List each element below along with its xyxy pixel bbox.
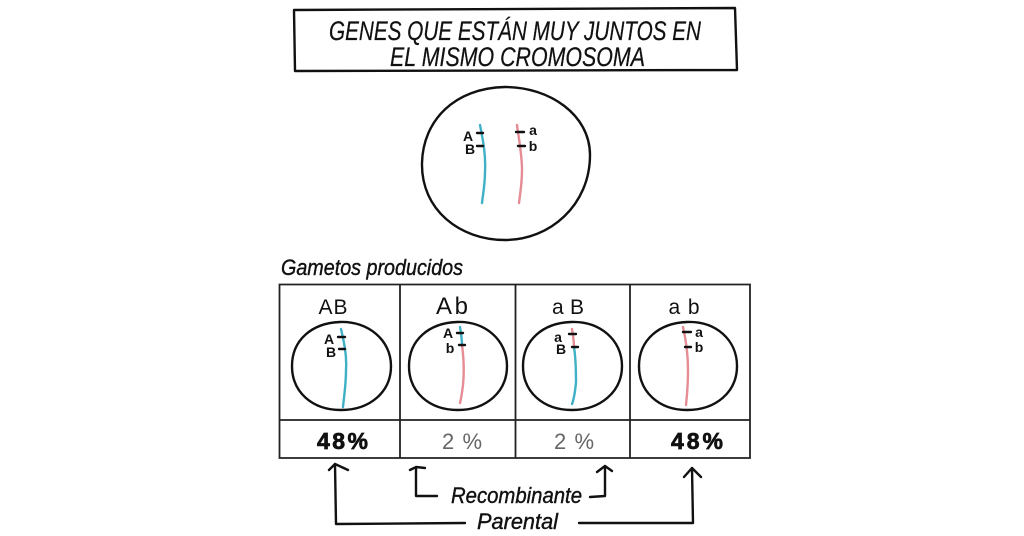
gamete Ab: A — [443, 325, 453, 341]
gamete AB — [292, 296, 391, 410]
label: parental: Parental — [477, 509, 559, 534]
gamete aB: a — [554, 329, 562, 345]
diagram: parent cell with two chromosomes — [422, 87, 590, 240]
table of gametes — [280, 284, 750, 458]
percentage 2% aB: 2% — [554, 429, 594, 454]
gamete AB: A — [324, 331, 334, 347]
gamete ab — [639, 296, 737, 410]
diagram: parent cell with two chromosomes: b — [529, 138, 537, 154]
title: GENES QUE ESTÁN MUY JUNTOS EN — [329, 16, 701, 46]
arrow: parental right — [579, 468, 701, 523]
gamete AB: B — [326, 344, 336, 360]
percentage 48% AB: 48% — [317, 428, 368, 454]
gamete AB: AB — [318, 296, 348, 319]
gamete Ab — [409, 293, 507, 410]
gamete Ab: Ab — [436, 293, 468, 320]
title — [294, 8, 737, 72]
arrow: recombinant right — [590, 466, 612, 497]
percentage 48% ab: 48% — [671, 428, 723, 454]
arrow: recombinant left — [410, 467, 437, 496]
gamete ab: a — [695, 324, 703, 340]
gamete ab: b — [695, 339, 703, 355]
diagram: parent cell with two chromosomes: a — [529, 122, 537, 138]
percentage 2% Ab: 2% — [442, 429, 482, 454]
gamete aB — [523, 296, 622, 410]
gamete Ab: b — [446, 340, 454, 356]
gamete aB: aB — [552, 296, 584, 319]
heading: gametes produced: Gametos producidos — [281, 255, 463, 280]
gamete ab: ab — [668, 296, 700, 319]
gamete aB: B — [556, 341, 566, 357]
diagram: parent cell with two chromosomes: A — [463, 128, 473, 144]
arrow: parental left — [329, 464, 465, 524]
label: recombinant: Recombinante — [451, 483, 582, 508]
diagram: parent cell with two chromosomes: B — [465, 141, 475, 157]
title: EL MISMO CROMOSOMA — [390, 42, 645, 72]
